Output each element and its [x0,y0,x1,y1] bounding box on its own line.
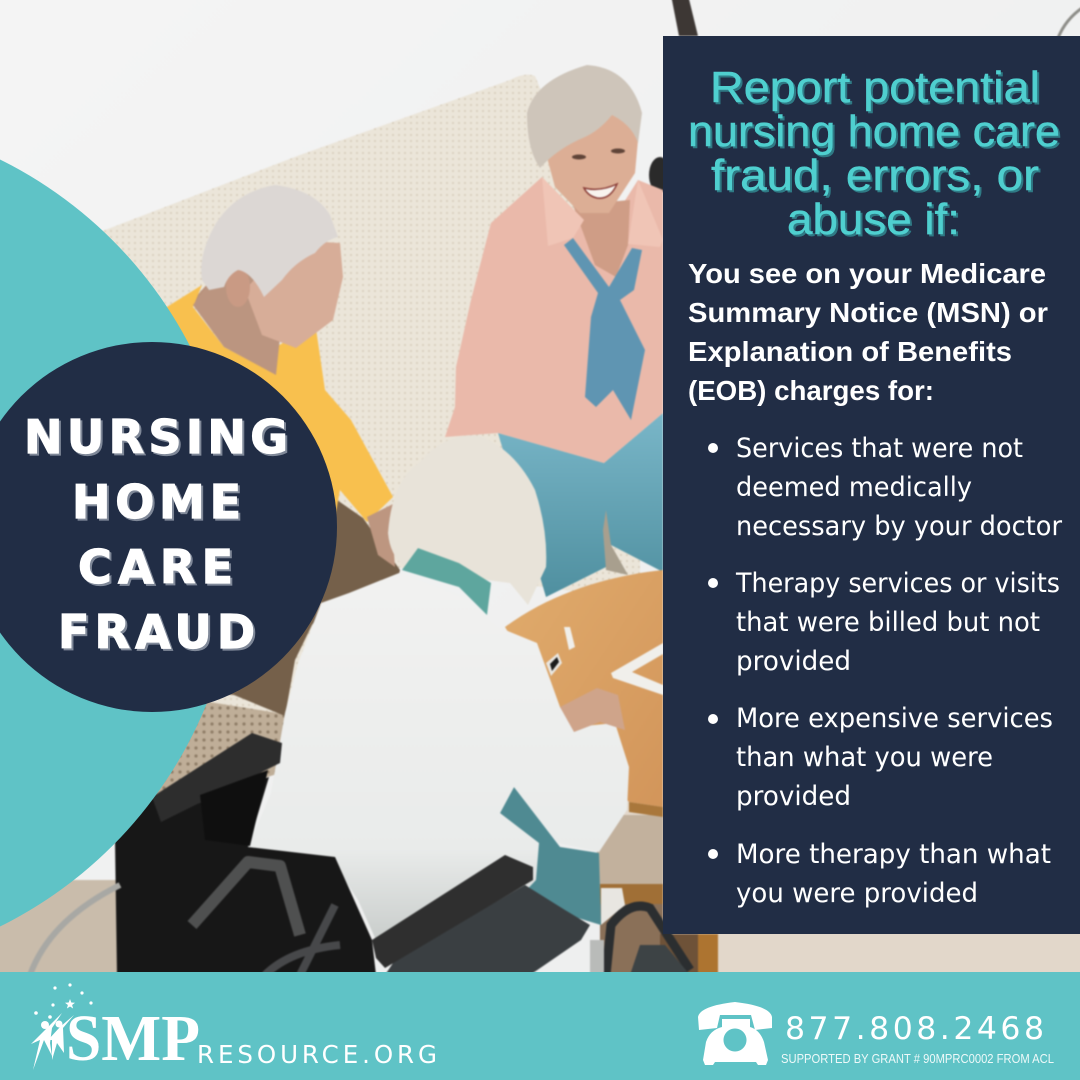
seated woman legs [500,787,601,925]
man sweater [150,285,393,600]
floor [0,880,180,975]
bullet 3 [708,703,1053,812]
wheelchair push handle [192,862,300,935]
dominoes on table [546,627,663,695]
man hand [367,503,395,567]
man hair [201,185,338,297]
man neck front [193,262,285,375]
man trousers [180,500,400,716]
blouse collar right [628,180,663,247]
intro text [688,258,1048,406]
wheelchair silver tube [590,940,604,975]
wall fixture top right [1058,6,1080,38]
panel heading [688,63,1060,244]
badge title [24,410,288,659]
bullet 1: deemed medically [736,472,972,503]
woman chest [573,200,630,277]
panel heading: Report potential [710,63,1040,112]
bullet 1 [708,433,1062,542]
intro text: (EOB) charges for: [688,375,934,406]
bullet 4: you were provided [736,878,978,909]
woman scarf [564,238,645,420]
wooden table base [600,884,718,974]
seated woman scarf [402,548,491,615]
phone number: 877.808.2468 [785,1011,1044,1047]
badge title: FRAUD [58,605,255,659]
panel heading: nursing home care [688,107,1060,156]
woman pants [498,413,663,597]
bullet 1: Services that were not [736,433,1023,464]
guitar neck [671,0,698,36]
carpet near table [597,815,663,885]
sofa blanket [100,75,640,790]
circle badge: nursing home care fraud [0,342,337,712]
woman mouth [584,184,617,198]
logo wordmark SMP: SMP [66,1002,200,1075]
bullet 3: provided [736,781,851,812]
bullet 4: More therapy than what [736,839,1051,870]
dark chair behind woman [649,157,671,193]
gap between legs [603,510,628,575]
wheelchair footrest [606,906,690,975]
navy circle [0,342,337,712]
bullet 2: provided [736,646,851,677]
panel: report fraud if [663,36,1080,934]
lower sofa blanket [150,700,290,810]
bullet 1: necessary by your doctor [736,511,1062,542]
wheelchair frame bars [265,905,340,975]
man neck [193,262,285,375]
navy panel background [663,36,1080,934]
intro text: Summary Notice (MSN) or [688,297,1048,328]
footer background [0,972,1080,1080]
bullet 2: that were billed but not [736,607,1040,638]
icon: telephone [698,1002,772,1065]
man ear [226,267,250,307]
man face [245,240,343,348]
intro text: Explanation of Benefits [688,336,1012,367]
bullet 2 [708,568,1060,677]
wheelchair left armrest [152,733,282,822]
logo stars [34,983,93,1019]
badge title: HOME [72,475,241,529]
intro text: You see on your Medicare [688,258,1046,289]
grant note: SUPPORTED BY GRANT # 90MPRC0002 FROM ACL [781,1052,1054,1066]
blouse collar [542,177,584,246]
badge title: CARE [78,540,233,594]
wheelchair right armrest [372,855,533,968]
wheelchair big wheel [30,885,120,975]
bullet 4 [708,839,1051,909]
wheelchair back [115,777,376,975]
logo figures [31,1013,74,1070]
SMP logo [31,983,437,1075]
bullet 2: Therapy services or visits [735,568,1060,599]
seated woman blouse [248,573,629,940]
wheelchair right side panel [385,885,590,975]
table top [505,570,663,807]
teal curved shape [0,115,238,971]
woman face [545,110,638,213]
bullet 3: than what you were [736,742,993,773]
woman blouse [445,177,663,463]
shoe [601,888,625,925]
bullet 3: More expensive services [736,703,1053,734]
carpet [600,800,1080,975]
wheelchair inner frame [200,770,268,846]
table edge [629,802,663,817]
woman hair [527,65,642,168]
woman eyes [572,148,625,160]
badge title: NURSING [24,410,288,464]
wheelchair footplate [630,945,690,975]
logo wordmark resource.org: RESOURCE.ORG [197,1040,437,1069]
footer band [0,972,1080,1080]
panel heading: abuse if: [787,195,960,244]
seated woman hair [388,436,546,605]
seated woman hand [560,688,625,732]
panel heading: fraud, errors, or [711,151,1039,200]
